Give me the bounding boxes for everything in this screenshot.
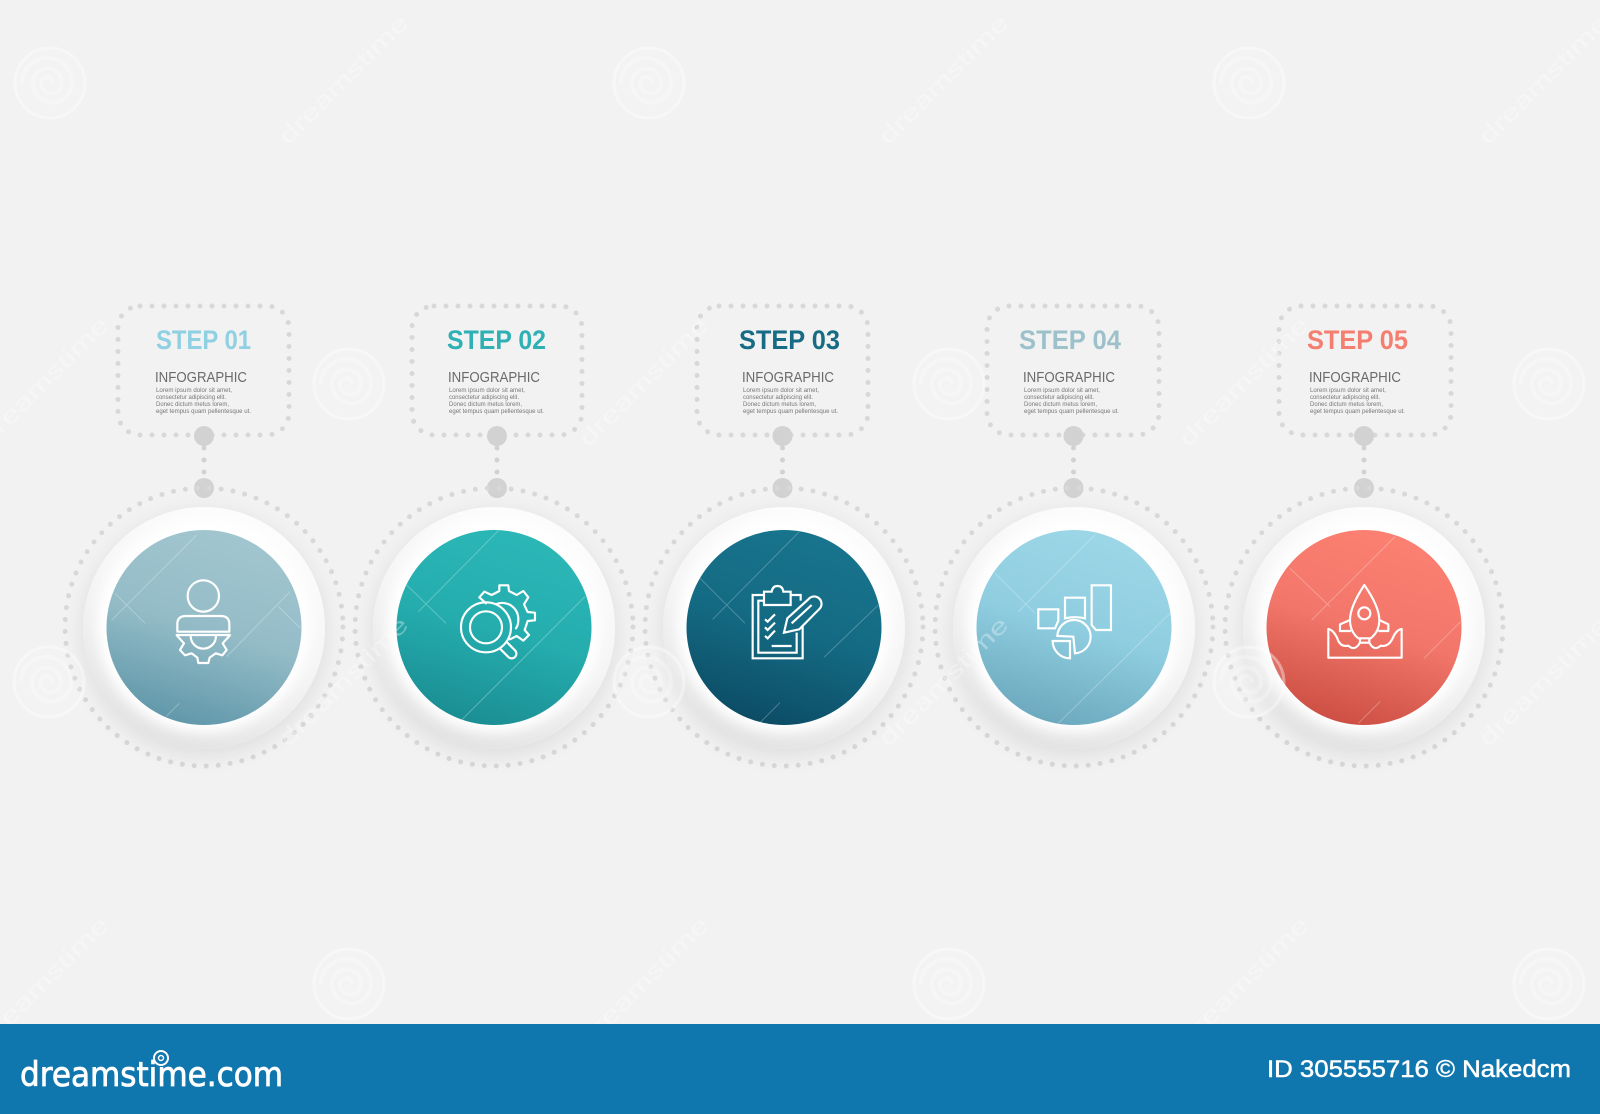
step 5 label box: Donec dictum metus lorem, xyxy=(1310,401,1383,408)
step 5 label box: Lorem ipsum dolor sit amet, xyxy=(1310,387,1386,394)
watermark overlay: dreamstime xyxy=(1173,311,1313,451)
step 4 dotted ring xyxy=(935,488,1213,766)
step 1 white ring xyxy=(83,507,325,749)
icon: rocket launch xyxy=(1328,585,1402,658)
step 3 label box: consectetur adipiscing elit. xyxy=(743,394,813,401)
watermark overlay: dreamstime xyxy=(273,9,413,149)
step 4 label box: consectetur adipiscing elit. xyxy=(1024,394,1094,401)
step 1 label box: consectetur adipiscing elit. xyxy=(156,394,226,401)
step 1 disk xyxy=(106,530,302,725)
step 4 disk xyxy=(976,530,1172,725)
step 2 label box: Donec dictum metus lorem, xyxy=(449,401,522,408)
step 3 dotted ring xyxy=(645,488,923,766)
step 4 white ring xyxy=(953,507,1195,749)
footer logo: dreamstime.com xyxy=(20,1055,283,1095)
step 4 xyxy=(935,306,1213,766)
step 2 label box: consectetur adipiscing elit. xyxy=(449,394,519,401)
step 5 label box: STEP 05 xyxy=(1307,325,1408,355)
step 3 label box xyxy=(697,306,868,435)
watermark overlay: dreamstime xyxy=(273,611,413,751)
step 2 label box: eget tempus quam pellentesque ut. xyxy=(449,408,544,415)
step 5 white ring xyxy=(1243,507,1485,749)
step 5 label box: eget tempus quam pellentesque ut. xyxy=(1310,408,1405,415)
step 4 label box xyxy=(987,306,1159,435)
footer image id and author: ID 305555716 © Nakedcm xyxy=(1267,1056,1571,1083)
step 1 label box: INFOGRAPHIC xyxy=(155,369,247,386)
step 2 label box: Lorem ipsum dolor sit amet, xyxy=(449,387,525,394)
step 1 dotted ring xyxy=(65,488,343,766)
step 1 label box: eget tempus quam pellentesque ut. xyxy=(156,408,251,415)
step 2 white ring xyxy=(373,507,615,749)
watermark overlay: dreamstime xyxy=(873,9,1013,149)
watermark overlay: dreamstime xyxy=(1473,9,1600,149)
step 5 dotted ring xyxy=(1225,488,1503,766)
icon: bars and pie chart xyxy=(1038,585,1111,658)
step 3 label box: STEP 03 xyxy=(739,325,840,355)
watermark overlay: dreamstime xyxy=(1173,911,1313,1051)
step 2 label box: INFOGRAPHIC xyxy=(448,369,540,386)
step 2 label box xyxy=(412,306,582,435)
watermark overlay: dreamstime xyxy=(573,311,713,451)
step 3 connector xyxy=(772,426,792,498)
step 3 white ring xyxy=(663,507,905,749)
step 1 label box xyxy=(118,306,289,435)
step 5 label box xyxy=(1279,306,1451,435)
step 3 disk xyxy=(686,530,882,725)
step 3 xyxy=(645,306,923,766)
step 2 xyxy=(355,306,633,766)
footer banner xyxy=(0,1024,1600,1114)
step 4 label box: Lorem ipsum dolor sit amet, xyxy=(1024,387,1100,394)
step 3 label box: eget tempus quam pellentesque ut. xyxy=(743,408,838,415)
step 5 xyxy=(1225,306,1503,766)
watermark overlay: dreamstime xyxy=(1473,611,1600,751)
step 2 disk xyxy=(396,530,592,725)
step 1 label box: STEP 01 xyxy=(156,325,251,355)
step 1 label box: Lorem ipsum dolor sit amet, xyxy=(156,387,232,394)
step 5 label box: consectetur adipiscing elit. xyxy=(1310,394,1380,401)
step 3 label box: Lorem ipsum dolor sit amet, xyxy=(743,387,819,394)
step 4 label box: INFOGRAPHIC xyxy=(1023,369,1115,386)
watermark overlay: dreamstime xyxy=(573,911,713,1051)
step 5 disk xyxy=(1266,530,1462,725)
step 4 connector xyxy=(1064,426,1084,498)
step 2 dotted ring xyxy=(355,488,633,766)
icon: magnifier and gear xyxy=(461,585,535,658)
step 3 label box: INFOGRAPHIC xyxy=(742,369,834,386)
step 2 connector xyxy=(487,426,507,498)
step 1 label box: Donec dictum metus lorem, xyxy=(156,401,229,408)
step 1 xyxy=(65,306,343,766)
step 1 connector xyxy=(194,426,214,498)
step 5 connector xyxy=(1354,426,1374,498)
icon: clipboard and pen xyxy=(753,586,822,658)
icon: person with gear xyxy=(177,580,230,663)
step 4 label box: STEP 04 xyxy=(1019,325,1121,355)
step 2 label box: STEP 02 xyxy=(447,325,546,355)
step 3 label box: Donec dictum metus lorem, xyxy=(743,401,816,408)
step 5 label box: INFOGRAPHIC xyxy=(1309,369,1401,386)
step 4 label box: eget tempus quam pellentesque ut. xyxy=(1024,408,1119,415)
watermark overlay: dreamstime xyxy=(873,611,1013,751)
step 4 label box: Donec dictum metus lorem, xyxy=(1024,401,1097,408)
